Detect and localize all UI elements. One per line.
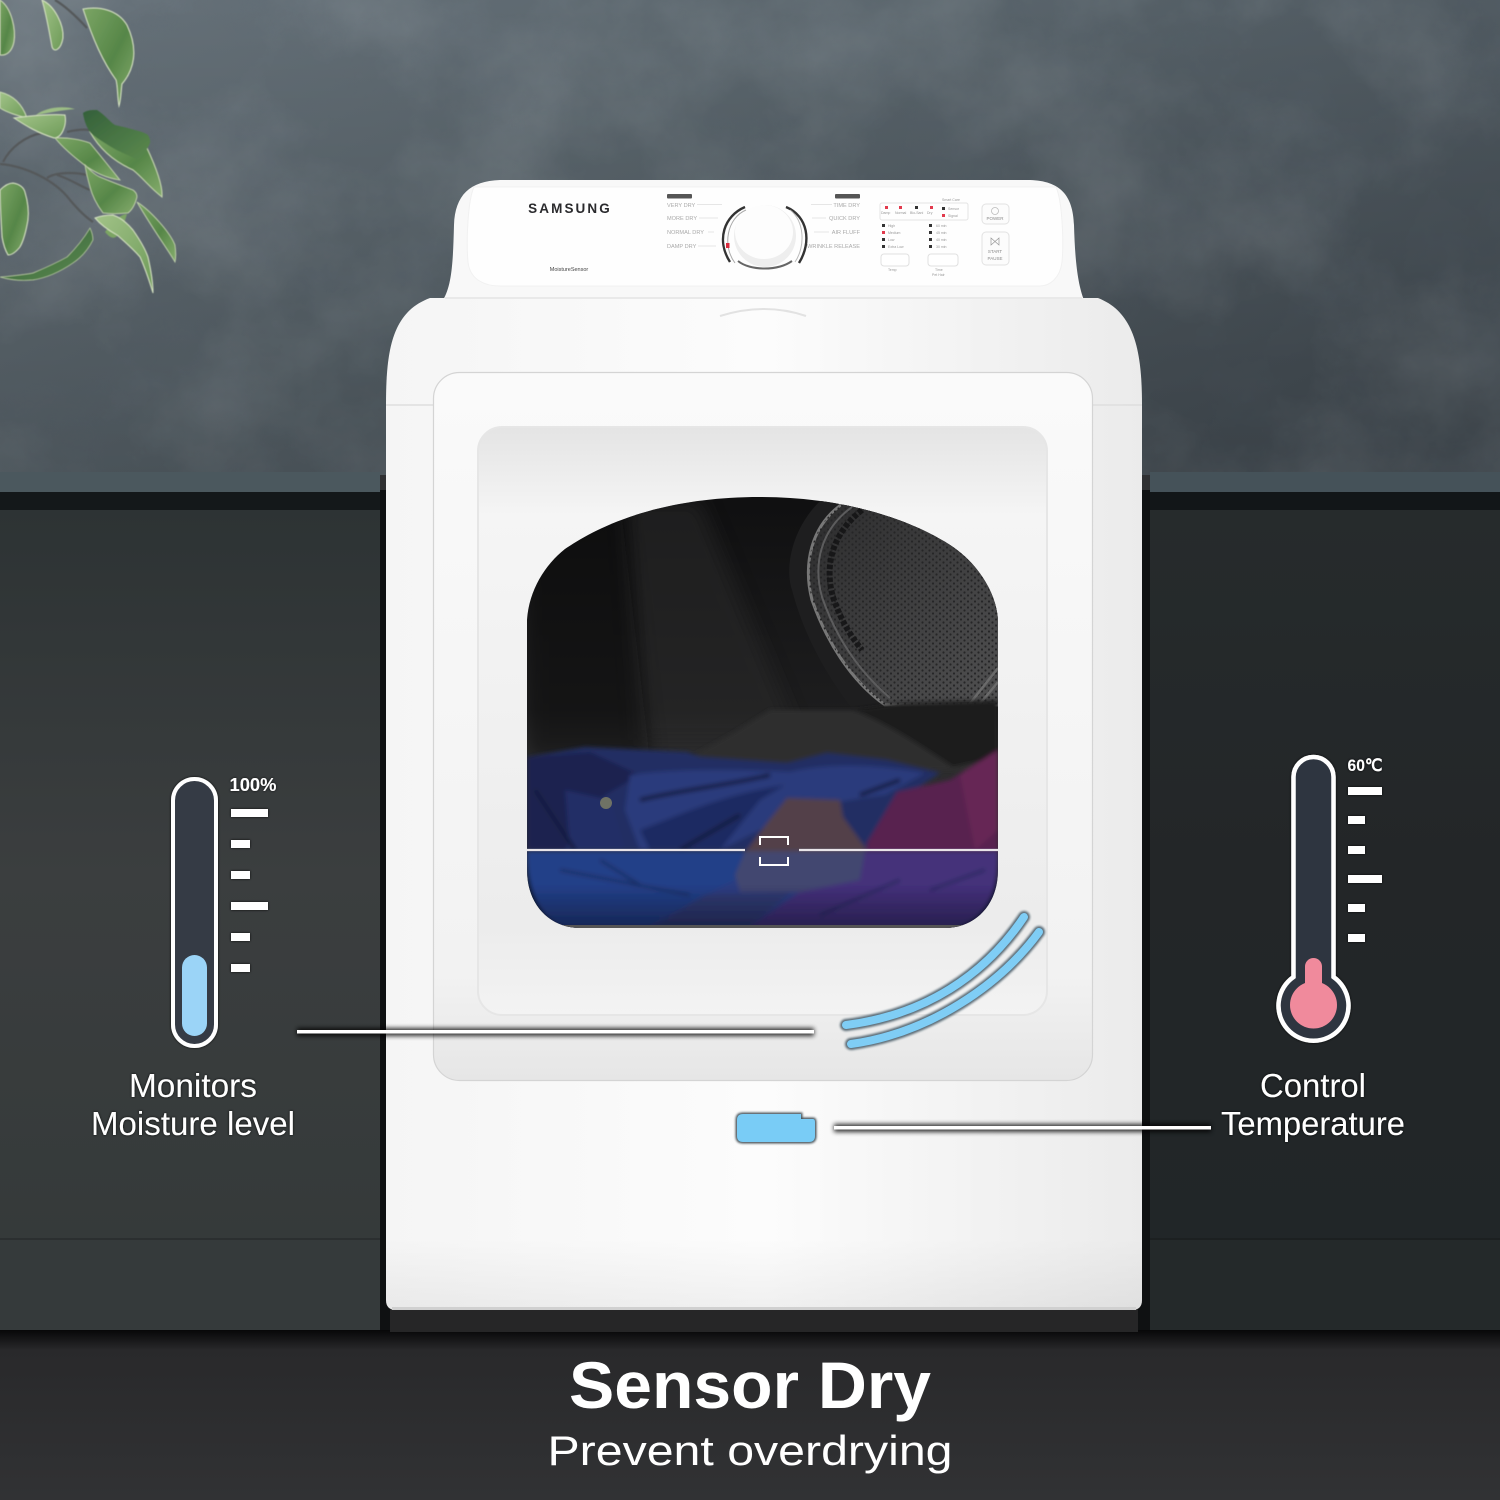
power and start buttons: [982, 204, 1009, 265]
thermometer outline: [1278, 757, 1348, 1041]
dryer base: [390, 1300, 1138, 1332]
dryer door: [434, 372, 1092, 1080]
indicator panel: Extra Low: [888, 245, 904, 249]
Samsung logo: SAMSUNG: [528, 201, 612, 216]
moisture caption: Moisture level: [91, 1105, 295, 1142]
indicator panel: 40 min: [936, 238, 947, 242]
leader line: temperature: [834, 1124, 1211, 1132]
door window: [527, 490, 1000, 931]
panel: right cabinet: [1150, 510, 1500, 1240]
indicator panel: Bio-Sani: [910, 211, 923, 215]
cycle labels right: TIME DRY: [833, 203, 860, 209]
subtitle: Prevent overdrying: [548, 1427, 952, 1474]
indicator panel: Normal: [895, 211, 907, 215]
cycle labels left: [667, 194, 722, 250]
moisture wash overlay: [527, 851, 998, 931]
thermometer ticks: [1348, 791, 1382, 938]
thermometer max label: 60℃: [1348, 756, 1382, 775]
power and start buttons: POWER: [986, 216, 1004, 221]
cycle labels right: AIR FLUFF: [832, 230, 861, 236]
floor: [0, 1330, 1500, 1500]
indicator panel: Temp: [888, 268, 897, 272]
indicator panel: Pet Hair: [932, 273, 945, 277]
indicator panel: 30 min: [936, 245, 947, 249]
power and start buttons: START: [988, 249, 1002, 254]
indicator panel: Signal: [948, 214, 958, 218]
cycle labels right: QUICK DRY: [829, 216, 860, 222]
temperature gauge: [1278, 756, 1382, 1041]
moisture sensor bars: [846, 917, 1039, 1044]
focus bracket: [760, 837, 788, 865]
moisture level line: [527, 849, 998, 851]
indicator panel: Dry: [927, 211, 933, 215]
temperature sensor: [737, 1114, 815, 1142]
indicator panel: 45 min: [936, 231, 947, 235]
temperature caption: Temperature: [1221, 1105, 1405, 1142]
thermometer fill: [1290, 958, 1337, 1028]
plant leaves: [0, 0, 176, 293]
cycle labels right: WRINKLE RELEASE: [807, 244, 860, 250]
indicator panel: Medium: [888, 231, 901, 235]
drum rear vent: [789, 500, 1000, 710]
laundry button: [600, 797, 612, 809]
gauge max label: 100%: [230, 774, 276, 795]
dryer body: [386, 298, 1142, 1310]
gauge ticks: [231, 813, 268, 968]
indicator panel: Damp: [881, 211, 890, 215]
power and start buttons: PAUSE: [988, 256, 1002, 261]
indicator panel: Smart Care: [942, 198, 960, 202]
indicator panel: Sensor: [948, 207, 960, 211]
moisture caption: Monitors: [129, 1067, 257, 1104]
moisture caption: [91, 1067, 295, 1142]
control dial: [723, 205, 806, 268]
indicator panel: Low: [888, 238, 895, 242]
temperature caption: [1221, 1067, 1405, 1142]
indicator panel: [880, 198, 968, 277]
gauge fill: [182, 955, 207, 1036]
door recess: [478, 427, 1047, 1015]
indicator panel: High: [888, 224, 895, 228]
gauge tube: [173, 779, 216, 1046]
moisture gauge: [173, 774, 276, 1046]
title: Sensor Dry: [569, 1348, 931, 1422]
cycle labels left: VERY DRY: [667, 203, 696, 209]
moisture sensor label: MoistureSensor: [550, 267, 588, 273]
dryer: [297, 180, 1211, 1332]
background: stone wall: [0, 0, 1500, 475]
ledge and cabinets: [0, 472, 1500, 1330]
cycle labels left: DAMP DRY: [667, 244, 697, 250]
indicator panel: 60 min: [936, 224, 947, 228]
indicator panel: Time: [935, 268, 943, 272]
dryer lower panel: [386, 1072, 1142, 1310]
cycle labels right: [807, 194, 861, 250]
temperature caption: Control: [1260, 1067, 1366, 1104]
leader line: moisture: [297, 1028, 814, 1036]
cycle labels left: NORMAL DRY: [667, 230, 704, 236]
cycle labels left: MORE DRY: [667, 216, 697, 222]
dryer control console: [443, 180, 1084, 300]
laundry: [527, 700, 998, 867]
panel: left cabinet: [0, 510, 380, 1240]
